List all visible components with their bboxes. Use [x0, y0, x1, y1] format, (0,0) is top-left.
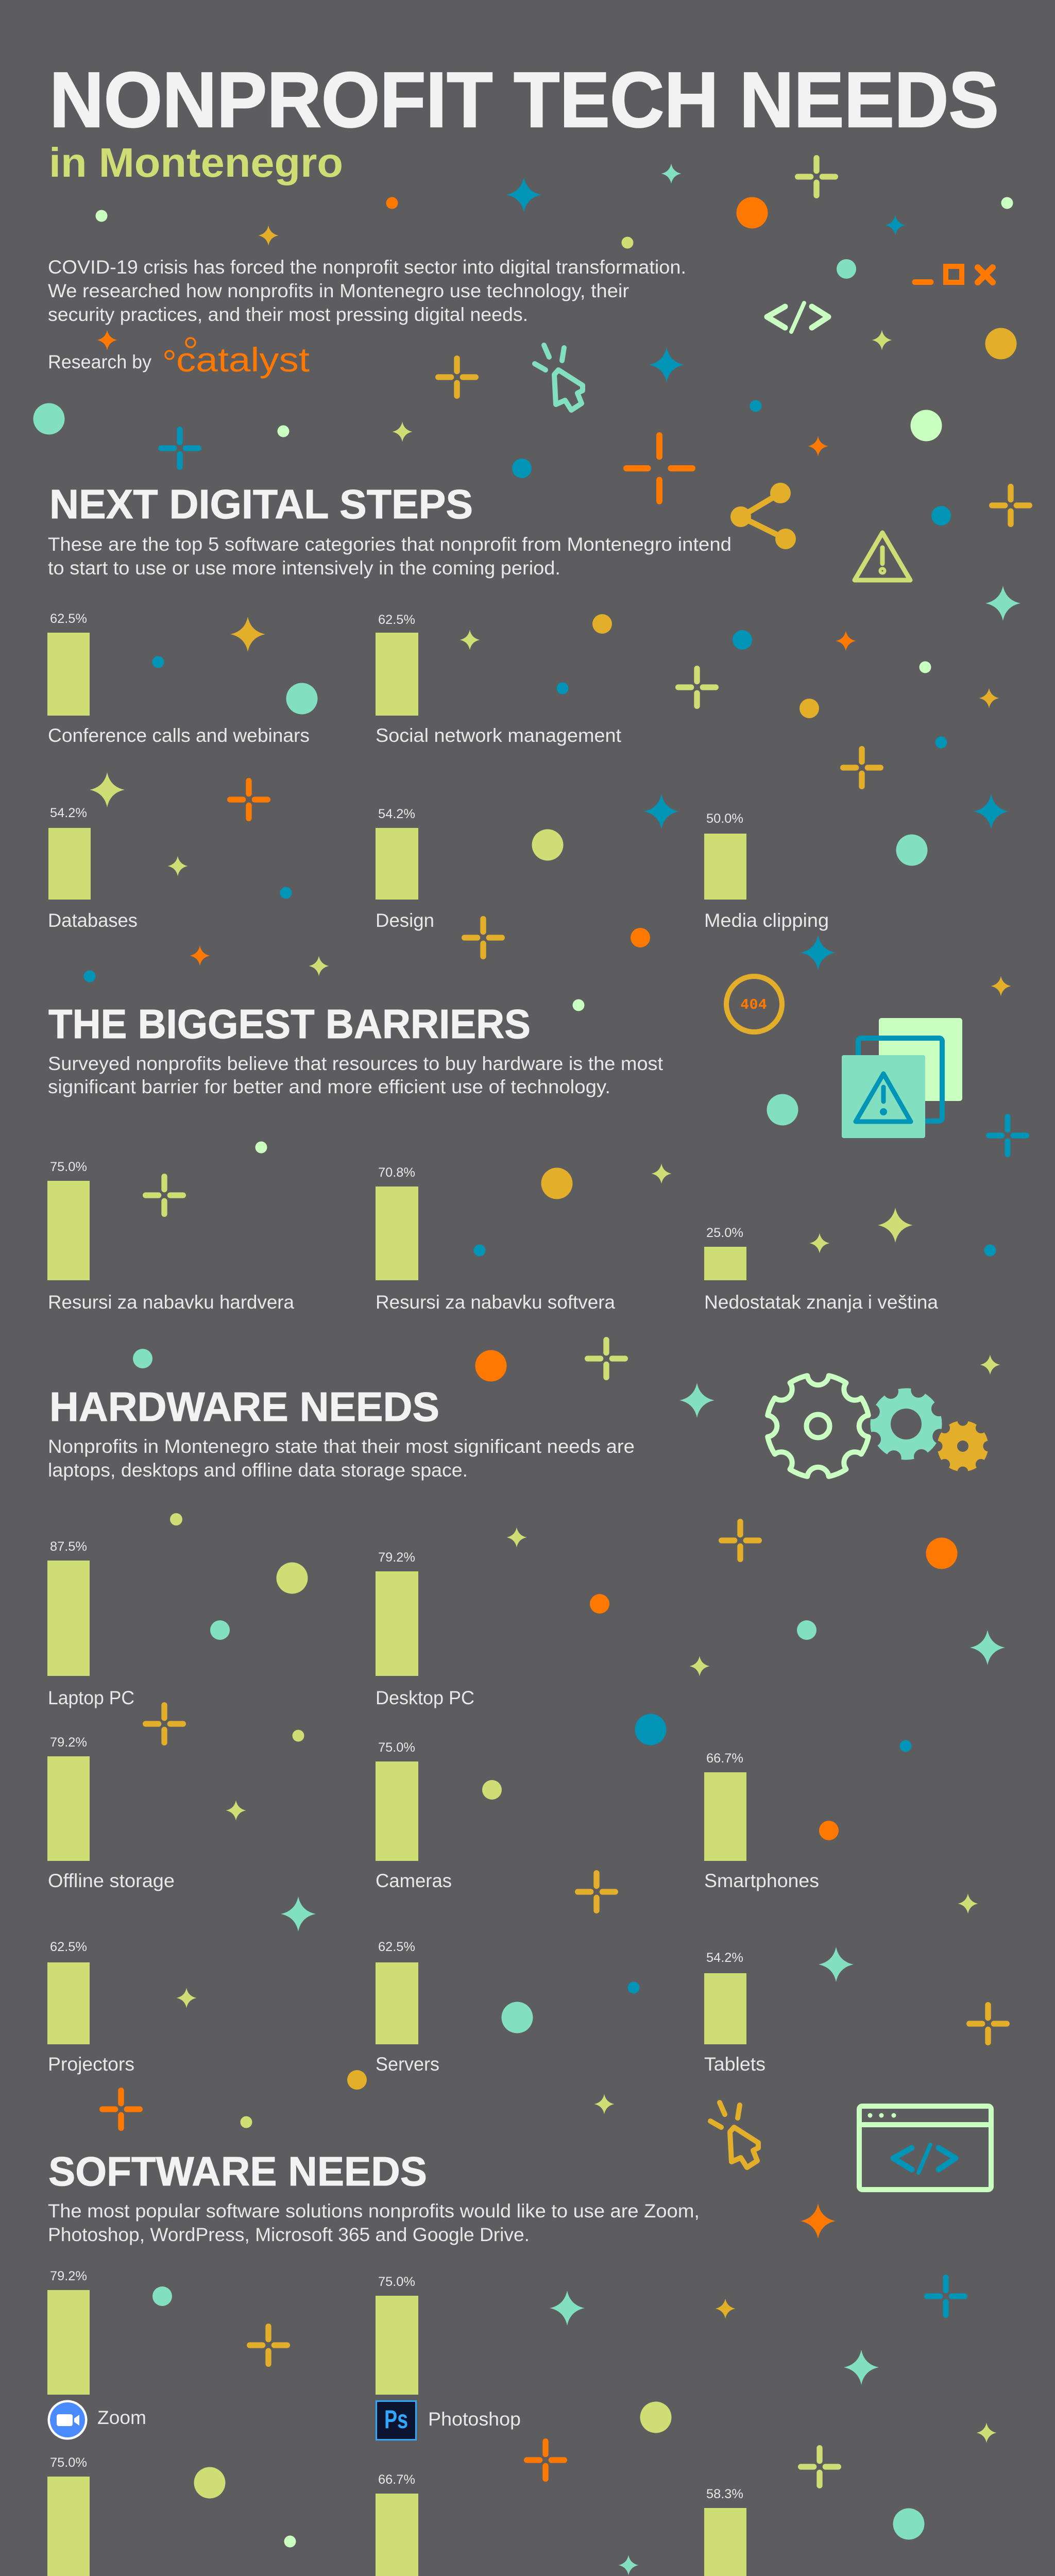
bar: design: [376, 807, 434, 931]
intro text: COVID-19 crisis has forced the nonprofit sector into digital transformation.: [48, 257, 686, 278]
bar: google drive: 58.3%: [706, 2487, 743, 2501]
heading: SOFTWARE NEEDS: [48, 2148, 427, 2194]
bar: desktop: 79.2%: [378, 1550, 415, 1565]
research credit with catalyst logo: Research by: [48, 351, 151, 372]
bar chart: next digital steps: [47, 612, 829, 931]
bar: desktop: [376, 1550, 474, 1708]
icon: 404 badge: [726, 976, 782, 1032]
bar: offline storage: 79.2%: [50, 1735, 87, 1750]
bar: zoom: 79.2%: [50, 2269, 87, 2283]
intro text: security practices, and their most pressing digital needs.: [48, 304, 528, 325]
bar: conference calls: Conference calls and webinars: [48, 725, 310, 746]
text block: Photoshop, WordPress, Microsoft 365 and Google Drive.: [48, 2224, 530, 2245]
bar: media clipping: Media clipping: [704, 910, 829, 931]
text block: [48, 1053, 663, 1097]
icon: mouse click gold: [710, 2103, 758, 2167]
bar: design: 54.2%: [378, 807, 415, 821]
panel: biggest barriers: [47, 976, 962, 1313]
text block: [48, 2200, 700, 2245]
bar: photoshop: [376, 2275, 521, 2440]
bar: offline storage: Offline storage: [48, 1870, 175, 1891]
intro text: [48, 257, 686, 325]
heading: NEXT DIGITAL STEPS: [49, 481, 473, 527]
panel: hardware needs: [47, 1376, 988, 2075]
bar: conference calls: [47, 612, 310, 746]
bar: laptop: 87.5%: [50, 1539, 87, 1554]
bar: lack of skills: 25.0%: [706, 1226, 743, 1240]
panel: next digital steps: [47, 481, 829, 931]
bar: zoom: Zoom: [97, 2407, 146, 2428]
bar: smartphones: [704, 1751, 819, 1891]
icon: warning pages: [842, 1018, 962, 1138]
text block: These are the top 5 software categories that nonprofit from Montenegro intend: [48, 534, 731, 555]
bar: tablets: [704, 1951, 765, 2075]
bar: tablets: Tablets: [704, 2054, 765, 2075]
bar: cameras: [376, 1740, 452, 1891]
bar: databases: 54.2%: [50, 806, 87, 820]
bar: servers: Servers: [376, 2054, 439, 2075]
bar: microsoft 365: [376, 2472, 545, 2576]
bar chart: barriers: [47, 1160, 938, 1313]
heading: HARDWARE NEEDS: [49, 1384, 439, 1430]
bar: wordpress: 75.0%: [50, 2455, 87, 2470]
bar: projectors: Projectors: [48, 2054, 134, 2075]
bar: software resources: Resursi za nabavku softvera: [376, 1292, 615, 1313]
research credit with catalyst logo: [48, 338, 310, 379]
intro text: We researched how nonprofits in Montenegro use technology, their: [48, 280, 629, 301]
panel: software needs: [47, 2103, 991, 2576]
bar: databases: Databases: [48, 910, 138, 931]
bar: social network: [376, 613, 622, 746]
icon: warning triangle: [855, 533, 910, 580]
icon: gears: [768, 1376, 988, 1477]
bar: smartphones: Smartphones: [704, 1870, 819, 1891]
bar: wordpress: [47, 2455, 191, 2576]
bar: lack of skills: Nedostatak znanja i veština: [704, 1292, 938, 1313]
icon: code brackets: [767, 303, 828, 332]
bar: social network: Social network management: [376, 725, 622, 746]
bar: databases: [48, 806, 138, 931]
bar: media clipping: [704, 811, 829, 931]
text block: Surveyed nonprofits believe that resources to buy hardware is the most: [48, 1053, 663, 1074]
bar: cameras: 75.0%: [378, 1740, 415, 1755]
bar: servers: 62.5%: [378, 1940, 415, 1954]
bar chart: hardware: [47, 1539, 819, 2075]
text block: The most popular software solutions nonprofits would like to use are Zoom,: [48, 2200, 700, 2222]
bar: laptop: Laptop PC: [48, 1687, 134, 1708]
heading: THE BIGGEST BARRIERS: [48, 1001, 531, 1047]
bar: hardware resources: 75.0%: [50, 1160, 87, 1174]
text block: to start to use or use more intensively in the coming period.: [48, 557, 560, 579]
bar: photoshop: 75.0%: [378, 2275, 415, 2289]
research credit with catalyst logo: catalyst: [176, 341, 310, 379]
bar chart: software: [47, 2269, 748, 2576]
icon: share nodes: [730, 483, 796, 549]
bar: software resources: [376, 1165, 615, 1313]
bar: hardware resources: [47, 1160, 294, 1313]
bar: photoshop: Photoshop: [428, 2409, 521, 2430]
bar: cameras: Cameras: [376, 1870, 452, 1891]
bar: tablets: 54.2%: [706, 1951, 743, 1965]
bar: zoom: [47, 2269, 146, 2440]
bar: projectors: 62.5%: [50, 1940, 87, 1954]
bar: social network: 62.5%: [378, 613, 415, 627]
bar: lack of skills: [704, 1226, 938, 1313]
text block: laptops, desktops and offline data storage space.: [48, 1460, 468, 1481]
text block: Nonprofits in Montenegro state that their most significant needs are: [48, 1436, 635, 1457]
bar: conference calls: 62.5%: [50, 612, 87, 626]
subtitle: in Montenegro: [49, 140, 343, 185]
icon: 404 badge: 404: [740, 997, 767, 1012]
bar: offline storage: [47, 1735, 175, 1891]
bar: smartphones: 66.7%: [706, 1751, 743, 1766]
text block: [48, 534, 731, 579]
bar: microsoft 365: 66.7%: [378, 2472, 415, 2487]
panel: header: [48, 56, 999, 580]
bar: hardware resources: Resursi za nabavku hardvera: [48, 1292, 294, 1313]
bar: laptop: [47, 1539, 134, 1708]
icon: mouse click: [535, 345, 583, 410]
bar: software resources: 70.8%: [378, 1165, 415, 1180]
text block: significant barrier for better and more efficient use of technology.: [48, 1076, 610, 1097]
title: NONPROFIT TECH NEEDS: [49, 56, 999, 144]
icon: code window: [859, 2106, 991, 2190]
bar: design: Design: [376, 910, 434, 931]
bar: photoshop: Ps: [384, 2405, 408, 2434]
bar: servers: [376, 1940, 439, 2075]
bar: desktop: Desktop PC: [376, 1687, 474, 1708]
bar: projectors: [47, 1940, 134, 2075]
bar: media clipping: 50.0%: [706, 811, 743, 826]
bar: google drive: [702, 2487, 748, 2576]
icon: window controls: [915, 266, 993, 282]
text block: [48, 1436, 635, 1481]
